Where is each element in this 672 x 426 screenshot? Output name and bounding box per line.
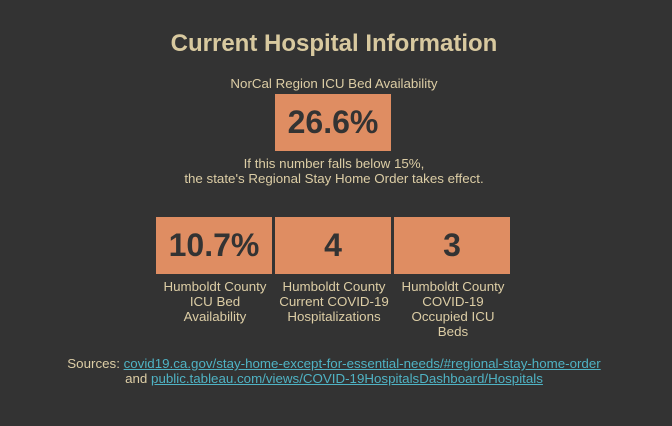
sources: and public.tableau.com/views/COVID-19HospitalsDashboard/Hospitals	[125, 371, 543, 386]
stat box: county occupied ICU beds: 3	[443, 227, 461, 263]
sources	[67, 356, 601, 386]
threshold note	[184, 156, 484, 186]
label: county occupied ICU beds: Beds	[438, 324, 468, 339]
threshold note: If this number falls below 15%,	[244, 156, 424, 171]
label: county ICU availability: Availability	[184, 309, 246, 324]
label: county hospitalizations: Hospitalizations	[287, 309, 381, 324]
stat box: county occupied ICU beds	[394, 217, 510, 274]
label: county occupied ICU beds	[402, 279, 504, 339]
label: county ICU availability: Humboldt County	[164, 279, 266, 294]
title: Current Hospital Information	[171, 30, 497, 57]
label: county ICU availability: ICU Bed	[190, 294, 240, 309]
label: county hospitalizations: Humboldt County	[282, 279, 385, 294]
threshold note: the state's Regional Stay Home Order takes effect.	[184, 171, 484, 186]
regional ICU label: NorCal Region ICU Bed Availability	[230, 76, 438, 91]
stat box: county hospitalizations	[275, 217, 391, 274]
label: county hospitalizations: Current COVID-19	[279, 294, 389, 309]
label: county occupied ICU beds: Humboldt County	[402, 279, 504, 294]
label: county occupied ICU beds: Occupied ICU	[412, 309, 494, 324]
stat box: county ICU availability	[156, 217, 272, 274]
stat box: county ICU availability: 10.7%	[169, 227, 259, 263]
label: county occupied ICU beds: COVID-19	[422, 294, 484, 309]
stat box: regional ICU availability	[275, 94, 391, 151]
stat box: regional ICU availability: 26.6%	[288, 104, 378, 140]
stat box: county hospitalizations: 4	[324, 227, 342, 263]
label: county ICU availability	[164, 279, 266, 324]
label: county hospitalizations	[279, 279, 389, 324]
sources: Sources: covid19.ca.gov/stay-home-except-for-essential-needs/#regional-stay-home-order	[67, 356, 601, 371]
